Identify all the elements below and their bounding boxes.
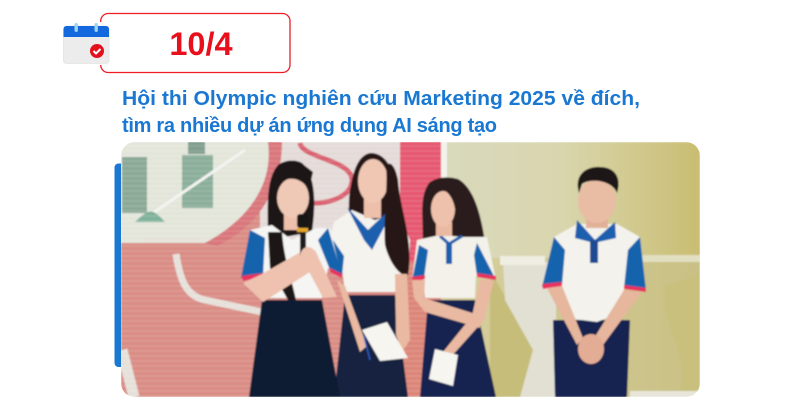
student 1 [241,161,342,397]
title: tìm ra nhiều dự án ứng dụng AI sáng tạo [122,115,497,137]
student 3 [412,177,496,397]
date text: 10/4 [169,26,233,62]
icon: calendar [64,23,109,64]
title: Hội thi Olympic nghiên cứu Marketing 2025 về đích, [122,88,640,110]
stage backdrop [121,142,441,397]
wall [441,142,700,397]
student 2 [328,153,410,397]
student 4 [542,167,646,397]
photo: four students on stage [121,142,700,397]
accent bar [114,164,121,367]
date box [101,14,290,72]
title [122,88,640,137]
